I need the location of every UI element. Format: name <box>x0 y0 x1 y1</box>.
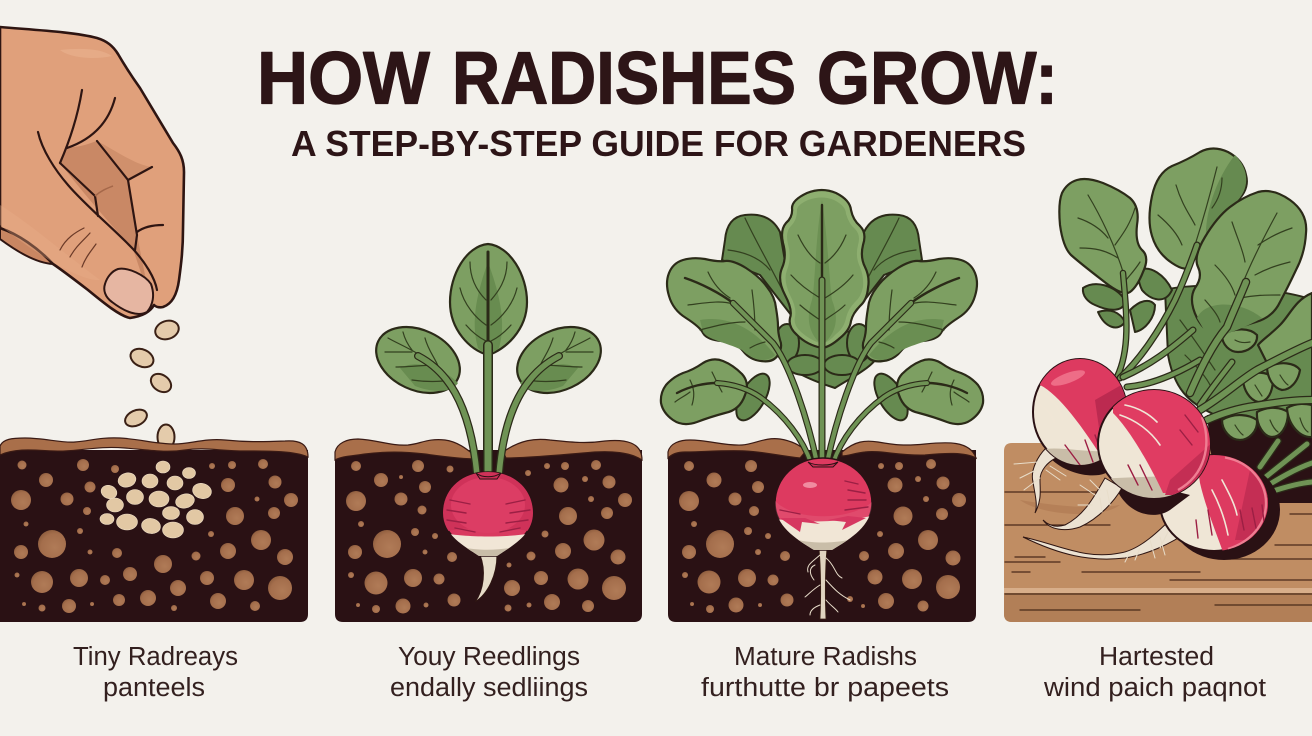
panel: soil with mature radish <box>661 190 983 622</box>
seedling stems <box>418 252 559 475</box>
leaf C <box>1192 191 1306 333</box>
thumbnail <box>104 269 153 314</box>
wooden board <box>1004 443 1312 622</box>
panel: soil with sown seeds <box>0 438 308 622</box>
caption: step 3: Mature Radishs <box>734 643 917 671</box>
soil <box>0 450 308 622</box>
panel: harvested radishes on wood <box>1004 148 1312 622</box>
caption: step 1: Tiny Radreays <box>73 643 238 671</box>
pebbles <box>11 459 298 613</box>
caption: step 4: wind paich paqnot <box>1043 674 1266 702</box>
radish root <box>443 471 533 600</box>
topsoil <box>0 438 308 457</box>
title: HOW <box>257 36 430 120</box>
title: RADISHES <box>452 36 796 120</box>
scalloped lower leaves <box>1222 415 1257 440</box>
caption: step 3 <box>701 643 949 702</box>
pebbles <box>679 459 966 613</box>
soil <box>668 450 976 622</box>
radish left <box>1014 355 1130 513</box>
radish middle <box>1043 385 1215 530</box>
middle radish shadow <box>1118 480 1190 515</box>
leaf A <box>1059 179 1146 293</box>
pebbles <box>346 460 632 614</box>
caption: step 2 <box>390 643 588 702</box>
back leaves <box>722 215 795 320</box>
center leaf <box>780 190 869 348</box>
seedling leaves <box>365 244 612 406</box>
panel: soil with seedling <box>335 244 642 622</box>
topsoil <box>335 439 642 460</box>
mature radish root <box>775 457 872 620</box>
caption: step 3: furthutte br papeets <box>701 674 949 702</box>
soil <box>335 450 642 622</box>
lower leaves <box>730 368 776 426</box>
falling seeds <box>122 318 181 450</box>
caption: step 4 <box>1043 643 1266 702</box>
caption: step 1 <box>73 643 238 702</box>
topsoil <box>668 439 976 458</box>
caption: step 2: Youy Reedlings <box>398 643 580 671</box>
title <box>257 36 1058 120</box>
title: GROW: <box>817 36 1058 120</box>
mature stems <box>677 205 967 463</box>
radish right shadow <box>1168 460 1280 560</box>
stems <box>1117 245 1312 493</box>
back foliage <box>1083 269 1312 440</box>
left leaves <box>667 258 781 361</box>
inner bush <box>775 329 882 388</box>
subtitle: A STEP-BY-STEP GUIDE FOR GARDENERS <box>291 123 1026 164</box>
caption: step 1: panteels <box>103 674 205 702</box>
foliage shadow <box>1207 415 1312 503</box>
mature leaves <box>661 190 983 426</box>
icon: hand dropping seeds <box>0 27 184 318</box>
caption: step 4: Hartested <box>1099 643 1214 671</box>
seeds in soil <box>99 461 213 538</box>
radish right <box>1023 450 1270 562</box>
caption: step 2: endally sedliings <box>390 674 588 702</box>
leaf B <box>1150 148 1247 269</box>
